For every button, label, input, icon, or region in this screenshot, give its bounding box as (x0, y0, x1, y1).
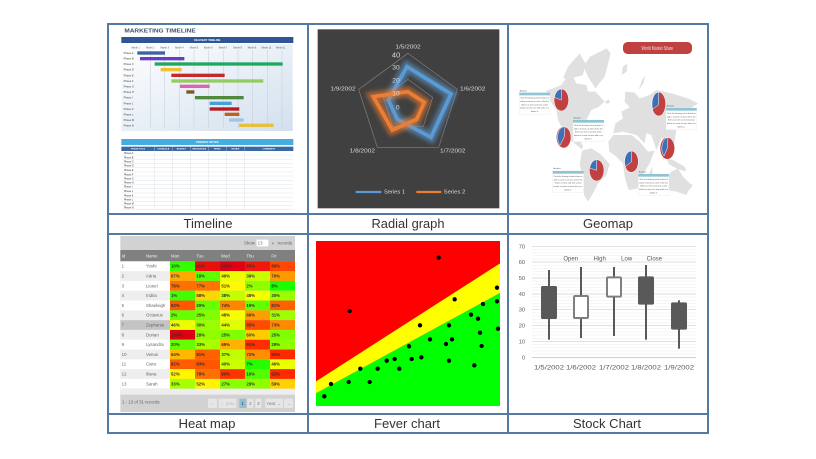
heat cells: 33% (171, 381, 180, 386)
heat cells: 51% (221, 283, 230, 288)
callout boxes: button to insert an item after it or (554, 185, 583, 188)
heat cells: 100% (171, 332, 182, 337)
show records control: records (278, 241, 292, 246)
notes table: Phase N (124, 207, 134, 210)
table header: Name (146, 253, 158, 258)
heat cells: 78% (196, 372, 205, 377)
table header: Id (122, 253, 126, 258)
callout boxes: Analysis (639, 170, 646, 173)
callout boxes: Analysis (667, 104, 674, 107)
heat cells: 90% (221, 372, 230, 377)
y axis labels: 0 (522, 355, 525, 361)
heat cells: 48% (246, 293, 255, 298)
callout boxes: delete it. (650, 191, 658, 194)
callout boxes: button to insert an item after it or (639, 188, 668, 191)
candles (541, 265, 687, 349)
heat cells: 38% (221, 293, 230, 298)
heat cells: 39% (246, 273, 255, 278)
heat cells: 85% (246, 323, 255, 328)
heat cells: 28% (271, 342, 280, 347)
id and name columns: Octavius (146, 313, 163, 318)
heat cells: 31% (271, 313, 280, 318)
callout boxes: button to insert an item after it or (667, 122, 696, 125)
callout boxes: Click the floating action button to (667, 112, 697, 115)
heat cells: 37% (221, 352, 230, 357)
radar axis values: 0 (396, 104, 400, 111)
red zone (316, 241, 500, 406)
table header (120, 250, 295, 261)
heat cells: 91% (196, 264, 205, 269)
y axis labels: 50 (519, 276, 525, 282)
legend: Series 2 (444, 190, 466, 196)
gantt chart: Month 10 (261, 46, 272, 49)
caption: geomap: Geomap (583, 216, 633, 231)
heat cells: 92% (271, 372, 280, 377)
callout boxes: add or remove an item of the list. (639, 181, 669, 184)
id and name columns: 3 (122, 283, 125, 288)
id and name columns: 1 (122, 264, 125, 269)
heat cells: 83% (171, 303, 180, 308)
id and name columns: 10 (122, 352, 127, 357)
date labels: 1/5/2002 (534, 365, 565, 371)
title pill: world market share: World Market Share (642, 46, 673, 52)
gantt chart: Phase J (124, 101, 134, 105)
heat cells: 20% (171, 342, 180, 347)
notes table: Phase M (124, 203, 134, 206)
panel: geomap (519, 42, 698, 202)
id and name columns: Lysandra (146, 342, 164, 347)
gantt chart: Month 6 (204, 46, 213, 49)
callout boxes: add or remove an item of the list. (520, 100, 550, 103)
callout boxes: add or remove an item of the list. (574, 127, 603, 130)
heat cells: 67% (171, 273, 180, 278)
gantt chart: Phase M (124, 118, 134, 122)
callout boxes: Select an item and click action (640, 185, 667, 188)
gantt chart: Phase N (124, 123, 134, 127)
callout boxes: button to insert an item after it or (574, 134, 603, 137)
table footer with pagination: ← prev (220, 401, 235, 406)
heat cells: 25% (271, 332, 280, 337)
table footer with pagination: 1 (241, 401, 244, 406)
radar category labels: 1/5/2002 (395, 45, 421, 51)
panel: timeline (121, 28, 294, 210)
heat cells: 1% (171, 293, 177, 298)
id and name columns: 11 (122, 362, 127, 367)
id and name columns: Yoshi (146, 264, 156, 269)
table footer with pagination: 2 (249, 401, 252, 406)
notes table: Phase B (124, 156, 134, 159)
data points (322, 256, 500, 398)
date labels: 1/9/2002 (664, 365, 695, 371)
gantt chart: Month 3 (160, 46, 170, 49)
callout boxes: Analysis (574, 116, 581, 119)
series labels: High (593, 257, 606, 263)
heat cells: 52% (171, 372, 180, 377)
gantt chart: Phase I (124, 96, 133, 100)
heat cells: 40% (221, 362, 230, 367)
radar grid (359, 53, 457, 147)
heat cells: 69% (246, 313, 255, 318)
date labels (534, 365, 695, 371)
gantt chart: Phase C (124, 62, 134, 66)
notes table: Phase D (124, 165, 134, 168)
callout boxes: Click the floating action button to (574, 124, 604, 127)
radar axis values: 40 (392, 50, 400, 59)
heat cells: 20% (196, 303, 205, 308)
callout boxes: delete it. (585, 137, 593, 140)
gantt chart: Month 2 (146, 46, 155, 49)
y axis labels: 40 (519, 292, 525, 298)
caption: timeline: Timeline (184, 216, 232, 231)
id and name columns: Sarah (146, 381, 158, 386)
show records control (244, 239, 292, 247)
notes table: ISSUES (231, 149, 240, 151)
callout boxes: Click the floating action button to (520, 97, 550, 100)
gantt chart: Month 11 (276, 46, 286, 49)
heat cells: 10% (171, 264, 180, 269)
heat cells: 81% (271, 303, 280, 308)
panel: stock chart (518, 244, 696, 371)
id and name columns: 8 (122, 332, 125, 337)
heat cells: 58% (196, 293, 205, 298)
y axis labels: 30 (519, 308, 525, 314)
heat cells: 46% (271, 362, 280, 367)
caption: fever chart: Fever chart (374, 416, 440, 431)
y axis labels: 10 (519, 339, 525, 345)
y axis labels: 20 (519, 324, 525, 330)
series labels (563, 257, 663, 263)
heat cells: 78% (171, 283, 180, 288)
heat cells: 91% (246, 342, 255, 347)
gantt chart: Phase A (124, 51, 134, 55)
id and name columns: Iliana (146, 372, 157, 377)
heat cells: 2% (246, 283, 253, 288)
heat cells (170, 261, 295, 389)
y axis labels: 60 (519, 260, 525, 266)
heat cells: 60% (246, 332, 255, 337)
callout boxes: Analysis (553, 167, 561, 170)
gantt chart: Phase E (124, 73, 134, 77)
date labels: 1/8/2002 (631, 365, 662, 371)
heat cells: 77% (196, 283, 205, 288)
heat cells: 19% (246, 303, 255, 308)
id and name columns: Indira (146, 293, 157, 298)
gantt chart: Month 8 (233, 46, 243, 49)
table footer with pagination: 1 - 13 of 31 records (122, 400, 160, 405)
notes table: Phase C (124, 161, 134, 164)
caption: radial graph: Radial graph (372, 216, 444, 231)
header: delivery timeline (121, 37, 293, 43)
chart gridlines (532, 246, 696, 357)
pie charts (554, 89, 675, 181)
header: project notes: PROJECT NOTES (196, 140, 219, 144)
yellow zone (316, 263, 500, 393)
heat cells: 25% (221, 332, 230, 337)
callout boxes: Click the floating action button to (639, 178, 669, 181)
caption: stock chart: Stock Chart (573, 416, 641, 431)
radar category labels: 1/9/2002 (330, 87, 356, 93)
callout boxes: Select an item and click action (575, 131, 602, 134)
table footer with pagination (120, 389, 295, 408)
id and name columns: 7 (122, 323, 125, 328)
caption: heat map: Heat map (178, 416, 236, 431)
radar axis values (392, 50, 400, 111)
heat cells: 81% (196, 352, 205, 357)
y axis labels (519, 244, 525, 361)
radar axis values: 30 (392, 65, 400, 72)
callout boxes: button to insert an item after it or (520, 107, 549, 110)
gantt chart: Month 9 (248, 46, 257, 49)
green zone (316, 293, 500, 406)
show records control: 13 (258, 241, 263, 246)
header: delivery timeline: DELIVERY TIMELINE (194, 38, 221, 42)
table header: Tue (196, 253, 204, 258)
gantt chart: Month 5 (190, 46, 199, 49)
table header: Fri (271, 253, 276, 258)
gantt chart: Phase D (124, 68, 134, 72)
id and name columns: 9 (122, 342, 125, 347)
series labels: Close (647, 257, 663, 263)
table grid (108, 24, 708, 433)
notes table: Phase K (124, 194, 134, 197)
id and name columns: 5 (122, 303, 125, 308)
title pill: world market share (623, 42, 692, 54)
notes table: SCHEDULE (157, 149, 170, 151)
radar category labels (330, 45, 485, 155)
heat cells: 16% (246, 372, 255, 377)
gantt chart: Phase K (124, 107, 134, 111)
heat cells: 52% (196, 381, 205, 386)
notes table: COMMENTS (262, 149, 276, 151)
id and name columns: 13 (122, 381, 127, 386)
heat cells: 73% (271, 323, 280, 328)
table header: Mon (171, 253, 180, 258)
heat cells: 44% (221, 323, 230, 328)
id and name columns: Adria (146, 273, 157, 278)
show records control: ▾ (272, 242, 274, 246)
id and name columns: 2 (122, 273, 125, 278)
gantt chart: Month 4 (175, 46, 184, 49)
radar axis values: 10 (392, 90, 400, 97)
heat cells: 72% (246, 352, 255, 357)
heat cells: 74% (221, 303, 230, 308)
legend: Series 1 (384, 190, 405, 196)
callout boxes: Click the floating action button to (554, 175, 583, 178)
panel: fever chart (316, 241, 500, 406)
heat cells: 30% (271, 293, 280, 298)
heat cells: 59% (271, 381, 280, 386)
callout boxes: Analysis (520, 89, 527, 92)
notes table: Phase A (124, 152, 134, 155)
series 1 line (388, 67, 451, 137)
notes table: Phase J (124, 190, 134, 193)
notes table: BUDGET (177, 149, 187, 151)
gantt chart: Phase B (124, 57, 134, 61)
callout boxes: add or remove an item of the list. (667, 115, 696, 118)
panel: radial graph (318, 29, 500, 208)
panel: heat map (120, 236, 295, 412)
id and name columns: 4 (122, 293, 125, 298)
series labels: Low (621, 257, 633, 263)
notes table: Phase F (124, 173, 134, 176)
callout boxes: Select an item and click action (521, 103, 548, 106)
heat cells: 65% (221, 342, 230, 347)
radar category labels: 1/8/2002 (350, 149, 375, 155)
id and name columns: 12 (122, 372, 127, 377)
header: project notes (121, 139, 293, 145)
date labels: 1/7/2002 (599, 365, 630, 371)
heat cells: 70% (271, 273, 280, 278)
notes table: Phase L (124, 198, 134, 201)
notes table (121, 147, 293, 210)
heat cells: 64% (171, 352, 180, 357)
heat cells: 18% (196, 273, 205, 278)
heat cells: 82% (171, 362, 180, 367)
gantt chart: Phase F (124, 79, 134, 83)
id and name columns: Shaeleigh (146, 303, 166, 308)
gantt chart: Phase H (124, 90, 134, 94)
heat cells: 33% (196, 342, 205, 347)
notes table: RISKS (214, 149, 221, 151)
notes table: Phase H (124, 182, 134, 185)
date labels: 1/6/2002 (566, 365, 597, 371)
heat cells: 28% (196, 332, 205, 337)
id and name columns (120, 261, 170, 389)
heat cells: 46% (171, 323, 180, 328)
heat cells: 30% (196, 323, 205, 328)
notes table: PHASE TITLE (131, 148, 146, 151)
callout boxes: delete it. (564, 188, 572, 191)
radar category labels: 1/6/2002 (460, 87, 485, 93)
callout boxes: delete it. (531, 110, 539, 113)
gantt chart: Phase L (124, 112, 134, 116)
id and name columns: Zephania (146, 323, 165, 328)
gantt chart: Phase G (124, 84, 134, 88)
heat cells: 25% (196, 313, 205, 318)
heat cells: 83% (196, 362, 205, 367)
callout boxes: Select an item and click action (555, 182, 581, 185)
id and name columns: Venus (146, 352, 158, 357)
id and name columns: 6 (122, 313, 125, 318)
legend (356, 190, 466, 196)
heat cells: 2% (171, 313, 177, 318)
table footer with pagination: ← (210, 401, 214, 406)
notes table: RESOURCES (192, 149, 207, 151)
gantt chart (121, 44, 293, 131)
notes table: Phase E (124, 169, 134, 172)
heat cells: 100% (221, 264, 233, 269)
table header: Wed (221, 253, 230, 258)
table footer with pagination: → (286, 401, 290, 406)
table header: Thu (246, 253, 254, 258)
heat cells: 48% (221, 313, 230, 318)
heat cells: 7% (246, 362, 253, 367)
table footer with pagination: next → (267, 401, 281, 406)
gantt chart: Month 7 (219, 46, 228, 49)
heat cells: 46% (221, 273, 230, 278)
callout boxes (519, 89, 697, 196)
table footer with pagination: 3 (257, 401, 260, 406)
y axis labels: 70 (519, 244, 525, 250)
series 2 line (373, 92, 424, 130)
show records control: Show (244, 241, 256, 246)
world map (546, 48, 698, 202)
heat cells: 27% (221, 381, 230, 386)
series labels: Open (563, 257, 578, 263)
heat cells: 28% (246, 381, 255, 386)
callout boxes: add or remove an item of the list. (553, 178, 583, 181)
callout boxes: delete it. (678, 125, 686, 128)
id and name columns: Cairo (146, 362, 157, 367)
callout boxes: Select an item and click action (668, 119, 695, 122)
notes table: Phase I (124, 186, 133, 189)
heat cells: 95% (246, 264, 255, 269)
notes table: Phase G (124, 177, 134, 180)
heat cells: 8% (271, 283, 278, 288)
id and name columns: Lionel (146, 283, 158, 288)
heat cells: 86% (271, 264, 280, 269)
id and name columns: Dorian (146, 332, 159, 337)
heat cells: 92% (271, 352, 280, 357)
radar category labels: 1/7/2002 (440, 149, 465, 155)
gantt chart: Month 1 (131, 46, 141, 49)
radar axis values: 20 (392, 77, 400, 84)
title: marketing timeline: MARKETING TIMELINE (124, 29, 196, 35)
